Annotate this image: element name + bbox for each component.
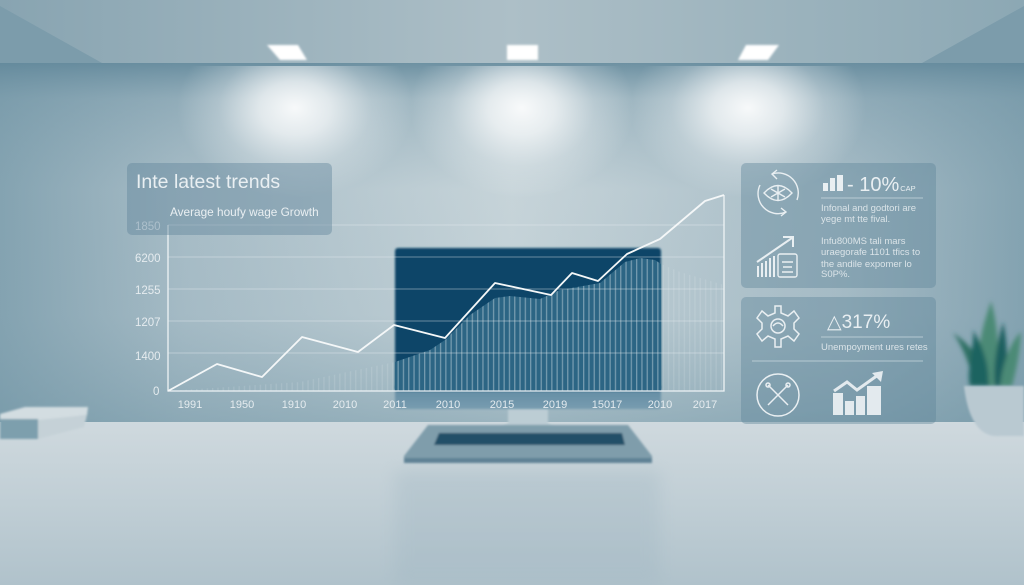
description two: uraegorafe 1101 tfics to <box>821 247 920 258</box>
keyboard keys <box>434 433 625 445</box>
x axis labels: 15017 <box>592 399 622 411</box>
axes <box>168 195 724 391</box>
description one: yege mt tte fival. <box>821 214 890 225</box>
x axis labels: 1910 <box>282 399 306 411</box>
x axis labels: 2010 <box>333 399 357 411</box>
y axis labels: 1850 <box>135 221 161 233</box>
stat: 317 percent: △317% <box>827 312 890 333</box>
x axis labels: 1991 <box>178 399 202 411</box>
title panel <box>127 163 332 235</box>
chart subtitle: Average houfy wage Growth <box>170 205 319 219</box>
description two: the andile expomer lo <box>821 259 912 270</box>
x axis labels: 2011 <box>383 399 407 411</box>
desk surface <box>0 422 1024 585</box>
stat: minus 10 percent: - 10%CAP <box>847 174 916 196</box>
screen area fill <box>395 258 661 391</box>
divider <box>821 336 923 338</box>
plant leaves <box>953 301 1021 386</box>
icon: circular arrows with leaf <box>758 170 798 216</box>
icon: bar chart with arrow <box>833 371 883 415</box>
title: Inte latest trends <box>136 171 280 193</box>
line chart <box>135 195 724 411</box>
description three: Unempoyment ures retes <box>821 342 928 353</box>
panel: bottom stats <box>741 297 936 424</box>
x axis labels: 2019 <box>543 399 567 411</box>
icon: gear <box>757 306 799 347</box>
back wall <box>0 63 1024 423</box>
y axis labels <box>135 221 161 398</box>
y axis labels: 1400 <box>135 351 161 363</box>
faint bars <box>168 258 724 391</box>
description two: S0P%. <box>821 269 850 280</box>
description two <box>821 236 920 280</box>
monitor screen <box>395 248 661 391</box>
divider <box>821 197 923 199</box>
icon: small bars <box>823 175 843 191</box>
monitor stand <box>498 408 558 430</box>
icon: crossed tools in circle <box>757 374 799 416</box>
computer monitor <box>395 248 661 430</box>
y axis labels: 1207 <box>135 317 161 329</box>
description one: Infonal and godtori are <box>821 203 916 214</box>
y axis labels: 1255 <box>135 285 161 297</box>
stack of books <box>0 407 88 439</box>
houseplant <box>953 301 1024 436</box>
x axis labels: 2010 <box>436 399 460 411</box>
plant pot <box>964 386 1024 436</box>
ceiling lights and glow <box>190 44 853 184</box>
divider <box>752 360 923 362</box>
description two: Infu800MS tali mars <box>821 236 906 247</box>
x axis labels <box>178 399 717 411</box>
panel: top stats <box>741 163 936 288</box>
ceiling <box>0 0 1024 66</box>
monitor bezel <box>395 385 661 409</box>
desk reflection <box>395 470 660 585</box>
keyboard base <box>404 425 652 463</box>
screen bars <box>395 258 661 391</box>
x axis labels: 2017 <box>693 399 717 411</box>
y axis labels: 6200 <box>135 253 161 265</box>
grid lines <box>168 225 724 353</box>
icon: chart with rising arrow <box>757 237 797 277</box>
x axis labels: 2010 <box>648 399 672 411</box>
description one <box>821 203 916 225</box>
x axis labels: 1950 <box>230 399 254 411</box>
trend line <box>168 195 724 391</box>
x axis labels: 2015 <box>490 399 514 411</box>
y axis labels: 0 <box>153 386 159 398</box>
